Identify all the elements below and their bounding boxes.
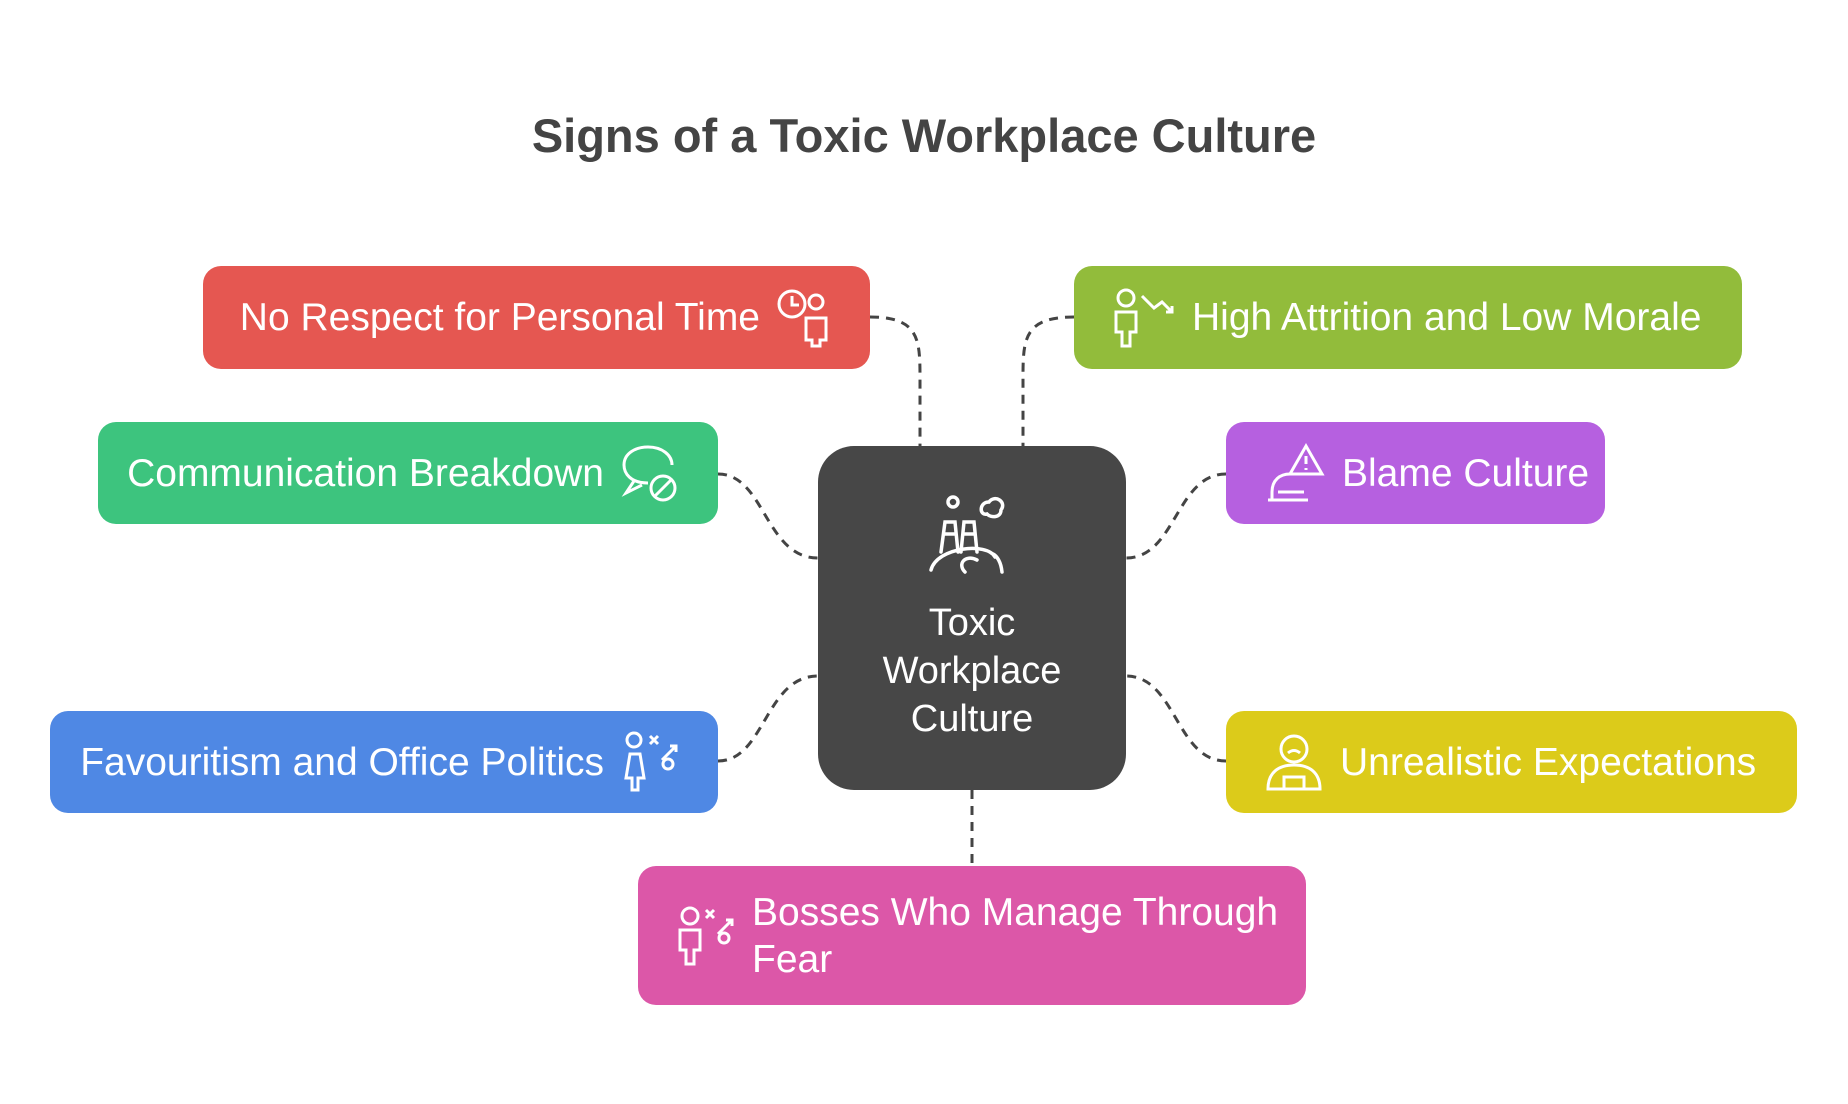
panel: Unrealistic Expectations (1226, 711, 1797, 813)
center: Toxic Workplace Culture: Culture (911, 698, 1033, 740)
panel: Bosses Who Manage Through Fear: Bosses Who Manage Through (752, 890, 1278, 934)
title: Signs of a Toxic Workplace Culture (532, 109, 1316, 162)
panel: Bosses Who Manage Through Fear: Fear (752, 938, 832, 980)
icon: boss strategy (678, 906, 734, 966)
panel: Unrealistic Expectations: Unrealistic Expectations (1340, 740, 1756, 784)
center: Toxic Workplace Culture: Toxic (929, 602, 1015, 644)
panel: Blame Culture (1226, 422, 1605, 524)
icon: strategy person (624, 732, 678, 792)
panel: No Respect for Personal Time (203, 266, 870, 369)
icon: person down arrow (1114, 288, 1174, 348)
icon: speech bubble blocked (622, 446, 676, 502)
icon: warning hard hat (1268, 443, 1324, 502)
panel: Bosses Who Manage Through Fear (638, 866, 1306, 1005)
panel: High Attrition and Low Morale (1074, 266, 1742, 369)
panel: Communication Breakdown (98, 422, 718, 524)
panel: Blame Culture: Blame Culture (1342, 452, 1589, 494)
icon: clock person (778, 290, 828, 348)
panel: No Respect for Personal Time: No Respect for Personal Time (240, 296, 760, 339)
center: Toxic Workplace Culture: Workplace (883, 650, 1061, 692)
panel: Favouritism and Office Politics (50, 711, 718, 813)
center: Toxic Workplace Culture (818, 446, 1126, 790)
panel: Communication Breakdown: Communication Breakdown (127, 452, 604, 494)
panel: High Attrition and Low Morale: High Attrition and Low Morale (1192, 296, 1701, 339)
icon: stressed person at desk (1266, 734, 1322, 790)
panel: Favouritism and Office Politics: Favouritism and Office Politics (80, 740, 604, 784)
icon: factory smoke (929, 495, 1004, 574)
